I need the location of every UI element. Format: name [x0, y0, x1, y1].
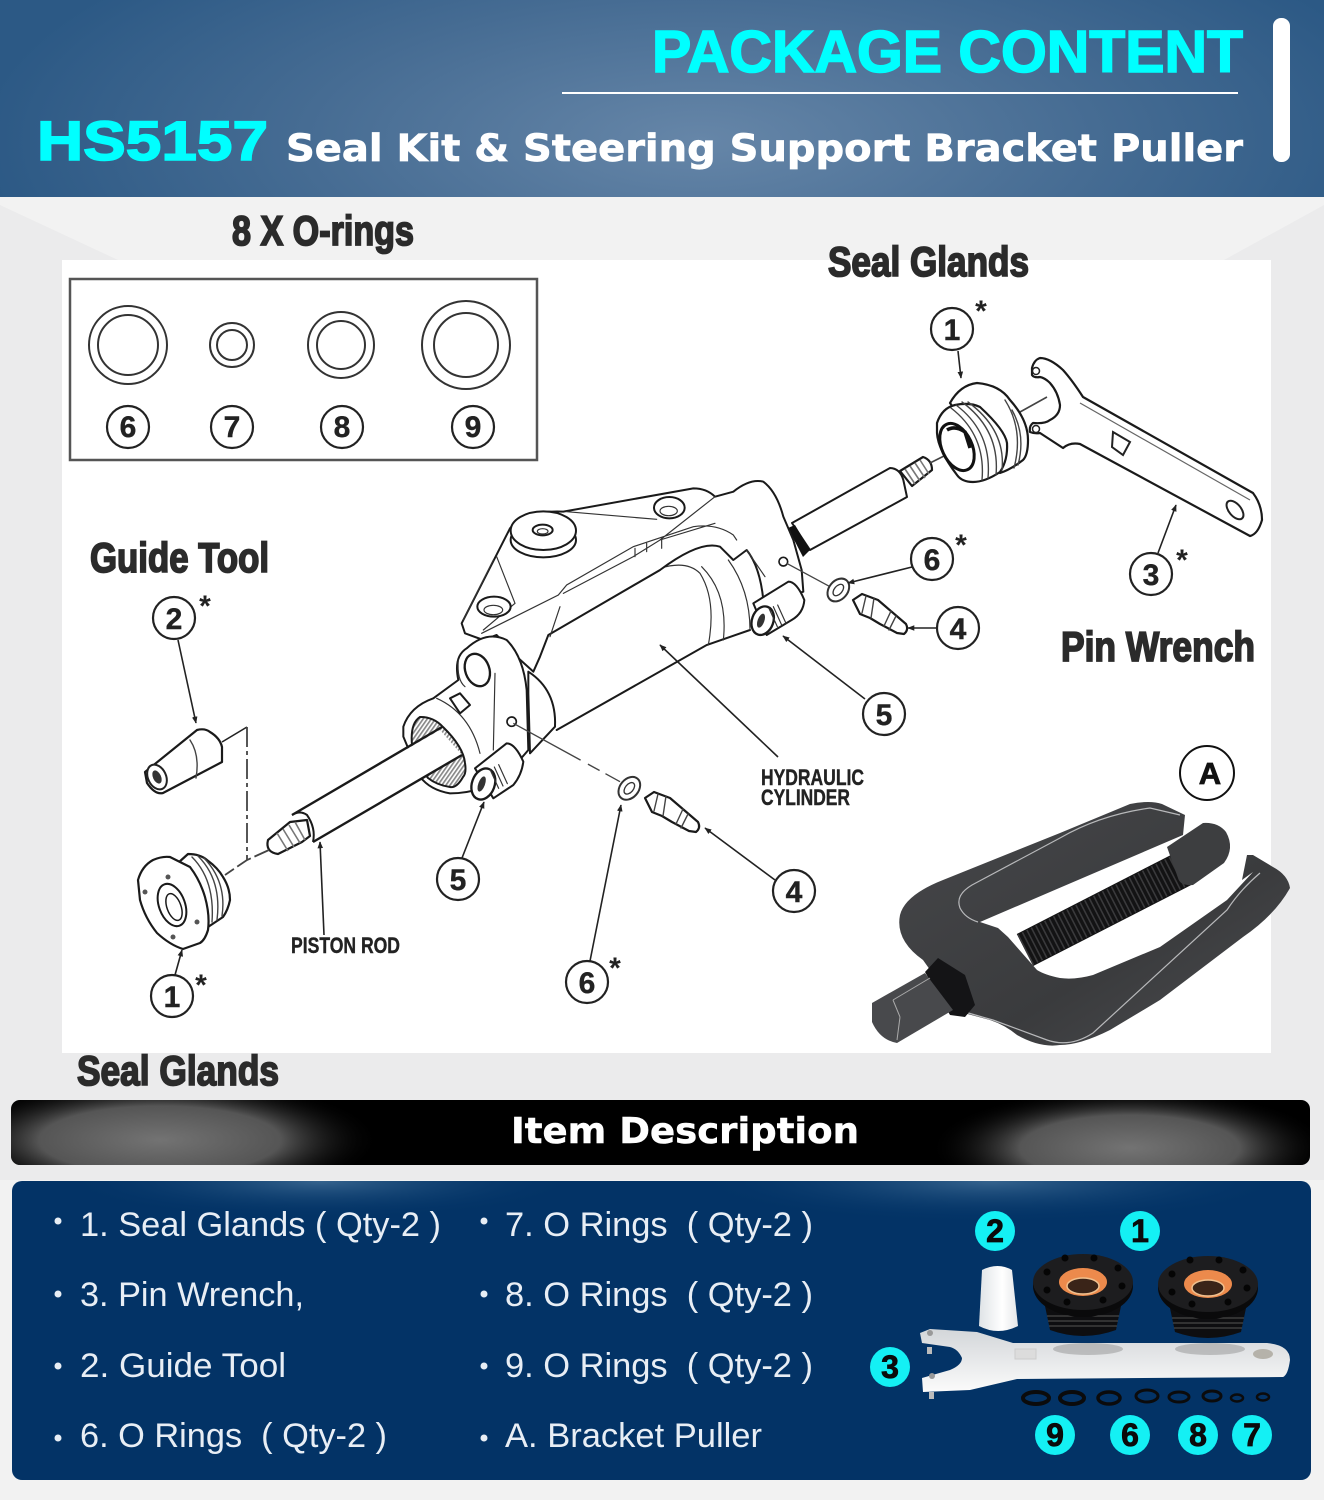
label: hydraulic cylinder	[761, 765, 864, 810]
callout numbers: 2	[166, 603, 182, 636]
cyan number badges: 9	[1046, 1417, 1064, 1453]
white accent pill	[1273, 18, 1290, 162]
steering cylinder drawing	[403, 468, 907, 804]
right rod	[792, 468, 907, 550]
callouts 6 7 8 9: 6	[120, 411, 136, 444]
callouts 6 7 8 9: 8	[334, 411, 350, 444]
product photo: seal gland left	[1033, 1254, 1133, 1336]
callouts 6 7 8 9: 9	[465, 411, 481, 444]
cyan number badges: 7	[1243, 1417, 1261, 1453]
heading: seal glands bottom: Seal Glands	[77, 1047, 279, 1094]
cyan number badges: 6	[1121, 1417, 1139, 1453]
seal gland: top	[930, 383, 1047, 482]
product photo: guide tool	[979, 1266, 1018, 1331]
bleeder fitting: right	[853, 594, 907, 634]
cyan number badges: 8	[1189, 1417, 1207, 1453]
callout numbers: 1	[164, 981, 180, 1014]
cyan number badges	[870, 1211, 1272, 1455]
puller screw	[1025, 868, 1185, 950]
seal gland: bottom	[138, 854, 230, 949]
callout numbers: 6	[924, 544, 940, 577]
item list panel	[12, 1181, 1311, 1480]
bracket	[462, 481, 803, 672]
washers	[614, 773, 645, 804]
puller edge highlights	[959, 808, 1260, 1043]
puller hex drive	[872, 958, 975, 1043]
label: hydraulic cylinder: CYLINDER	[761, 785, 850, 810]
product photo: o-rings	[1023, 1390, 1269, 1404]
cyan number badges: 2	[986, 1213, 1004, 1249]
list column 2: 9. O Rings ( Qty-2 )	[505, 1347, 813, 1385]
label: hydraulic cylinder: HYDRAULIC	[761, 765, 864, 790]
callout numbers: *	[955, 529, 967, 562]
callout numbers	[151, 295, 1188, 1017]
o-ring 6	[89, 306, 167, 384]
list column 1: 1. Seal Glands ( Qty-2 )	[80, 1206, 441, 1244]
callout numbers: *	[199, 590, 211, 623]
heading: 8 x o-rings: 8 X O-rings	[232, 207, 414, 254]
callout numbers: *	[195, 969, 207, 1002]
header banner	[0, 0, 1324, 197]
heading: guide tool: Guide Tool	[90, 534, 269, 581]
left fitting	[475, 743, 523, 798]
title: package content: PACKAGE CONTENT	[652, 19, 1243, 85]
label: piston rod: PISTON ROD	[291, 933, 400, 958]
model number: HS5157	[37, 109, 268, 172]
subtitle: Seal Kit & Steering Support Bracket Puller	[286, 127, 1244, 170]
product photo: pin wrench	[920, 1329, 1290, 1399]
product photo: seal gland right	[1158, 1256, 1258, 1338]
callout numbers: 6	[579, 967, 595, 1000]
piston rod and thread	[267, 727, 462, 854]
wrench details	[1032, 368, 1250, 522]
callout numbers: *	[1176, 544, 1188, 577]
callout A	[1180, 746, 1234, 800]
callouts 6 7 8 9: 7	[224, 411, 240, 444]
item description bar: Item Description	[511, 1111, 859, 1152]
callout numbers: *	[975, 295, 987, 328]
callout numbers: 5	[876, 699, 892, 732]
list column 2: 7. O Rings ( Qty-2 )	[505, 1206, 813, 1244]
left housing	[528, 672, 555, 753]
dashed centre lines	[513, 723, 620, 782]
callout numbers: 3	[1143, 559, 1159, 592]
callouts 6 7 8 9	[107, 406, 494, 448]
list column 2: A. Bracket Puller	[505, 1417, 762, 1455]
guide tool drawing	[143, 727, 269, 875]
o-ring 9	[422, 301, 510, 389]
bracket puller	[872, 746, 1290, 1046]
o-ring 7	[210, 323, 254, 367]
callout numbers: *	[609, 952, 621, 985]
title underline	[562, 92, 1238, 94]
bore	[412, 717, 466, 787]
right fitting	[753, 582, 804, 635]
callout numbers: 1	[944, 314, 960, 347]
rear rod thread	[900, 457, 932, 486]
cyan number badges: 3	[881, 1349, 899, 1385]
diagram panel	[62, 207, 1290, 1053]
o-ring table	[70, 279, 537, 460]
heading: pin wrench: Pin Wrench	[1061, 623, 1255, 670]
boss on bracket	[511, 523, 576, 557]
pin wrench drawing	[1030, 358, 1262, 536]
list column 1: 3. Pin Wrench,	[80, 1276, 304, 1314]
item description bar	[11, 1100, 1310, 1165]
callout A: A	[1199, 756, 1221, 791]
puller yoke	[899, 802, 1290, 1046]
list column 1	[54, 1206, 441, 1455]
bleeder fitting: left	[645, 792, 699, 832]
cyan number badges: 1	[1131, 1213, 1149, 1249]
leader arrows	[175, 351, 1176, 975]
puller collar	[1167, 823, 1230, 885]
list column 1: 2. Guide Tool	[80, 1347, 286, 1385]
list column 2: 8. O Rings ( Qty-2 )	[505, 1276, 813, 1314]
callout numbers: 4	[786, 876, 803, 909]
heading: seal glands top: Seal Glands	[828, 238, 1029, 285]
o-ring 8	[308, 312, 374, 378]
top and lower holes	[654, 497, 685, 518]
cylinder	[550, 553, 767, 730]
callout numbers: 4	[950, 613, 967, 646]
callout numbers: 5	[450, 864, 466, 897]
list column 1: 6. O Rings ( Qty-2 )	[80, 1417, 387, 1455]
list column 2	[480, 1206, 813, 1455]
